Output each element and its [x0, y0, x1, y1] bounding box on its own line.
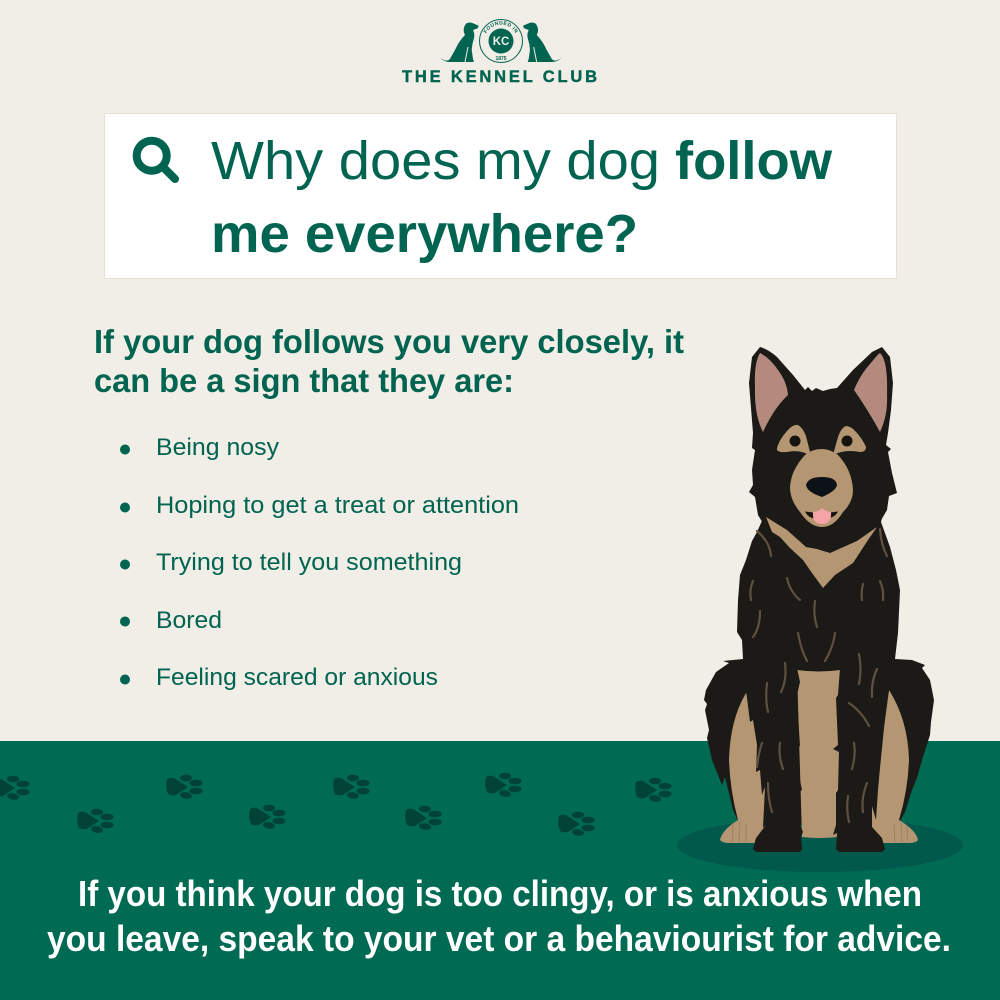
- dog shadow: [677, 818, 963, 872]
- dog ear inner right: [854, 353, 887, 432]
- paw prints: [0, 773, 671, 837]
- dog eye patches: [777, 425, 866, 456]
- logo dog right: [523, 22, 562, 62]
- dog toe lines: [732, 822, 908, 842]
- dog chest bib: [766, 517, 877, 588]
- green floor panel: [0, 741, 1000, 1000]
- dog illustration: [677, 347, 963, 872]
- icon: magnifying glass: [137, 141, 175, 179]
- bullet list: Hoping to get a treat or attention: [156, 492, 519, 519]
- dog tan thighs and chest: [720, 670, 918, 843]
- subheading: If your dog follows you very closely, it: [94, 323, 684, 360]
- dog muzzle: [790, 449, 853, 527]
- bullet list: [120, 434, 519, 691]
- dog ears and head fur: [749, 347, 897, 560]
- bullet list: Trying to tell you something: [156, 549, 462, 576]
- dog ear inner left: [755, 353, 788, 432]
- subheading: [94, 323, 684, 399]
- logo seal: [479, 19, 523, 63]
- dog nose: [806, 477, 837, 497]
- dog tongue: [813, 508, 831, 524]
- dog body fur: [704, 505, 934, 825]
- bullet list: Bored: [156, 607, 222, 634]
- closing advice text: If you think your dog is too clingy, or is anxious when: [78, 873, 922, 914]
- closing advice text: you leave, speak to your vet or a behaviourist for advice.: [47, 918, 951, 959]
- logo wordmark: THE KENNEL CLUB: [402, 68, 597, 86]
- logo seal: FOUNDED IN: [484, 21, 518, 34]
- dog right leg: [833, 650, 889, 852]
- dog left leg: [746, 650, 803, 852]
- dog chest fur: [745, 600, 895, 665]
- search box panel: [104, 114, 896, 278]
- subheading: can be a sign that they are:: [94, 362, 514, 399]
- logo: The Kennel Club: [402, 19, 597, 86]
- bullet list: Feeling scared or anxious: [156, 664, 438, 691]
- dog eyes: [790, 436, 852, 446]
- title: [211, 131, 833, 264]
- logo dog left: [440, 22, 479, 62]
- title: Why does my dog: [211, 131, 660, 191]
- logo seal: 1875: [495, 56, 507, 62]
- dog fur streaks: [750, 529, 887, 822]
- title: follow: [675, 131, 833, 191]
- bullet list: Being nosy: [156, 434, 279, 461]
- logo seal: KC: [493, 36, 509, 48]
- dog mouth: [805, 512, 838, 518]
- title: me everywhere?: [211, 204, 638, 264]
- closing advice text: [47, 873, 951, 959]
